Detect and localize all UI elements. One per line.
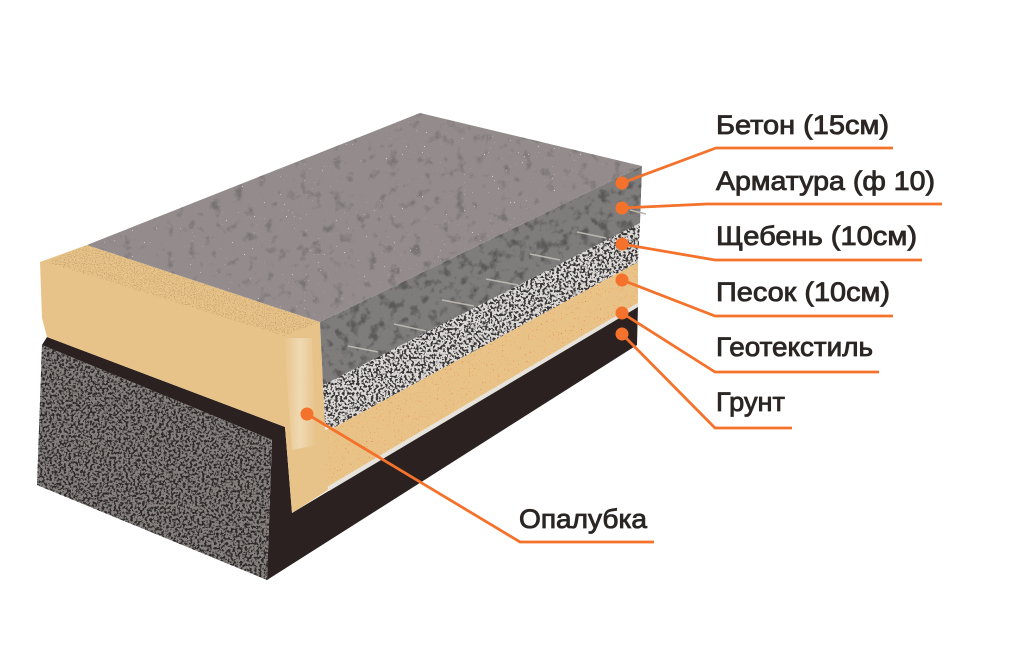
label: Щебень: Щебень (10см) bbox=[716, 221, 917, 251]
label: Щебень bbox=[616, 221, 922, 260]
geotextile layer bbox=[327, 303, 638, 491]
label: Песок: Песок (10см) bbox=[716, 277, 890, 307]
label: Бетон bbox=[616, 110, 893, 190]
formwork timber bbox=[40, 245, 328, 513]
label: Грунт: Грунт bbox=[716, 387, 785, 417]
label: Опалубка bbox=[300, 408, 654, 542]
label: Грунт bbox=[616, 328, 792, 428]
formwork stippled shading bbox=[46, 245, 320, 336]
label: Геотекстиль bbox=[616, 306, 879, 372]
formwork pale end strip bbox=[284, 338, 316, 450]
road cross-section illustration bbox=[37, 113, 646, 580]
sand layer bbox=[323, 262, 638, 487]
rebar ends bbox=[348, 210, 646, 352]
label: Геотекстиль: Геотекстиль bbox=[716, 332, 873, 362]
label: Бетон: Бетон (15см) bbox=[716, 110, 889, 140]
ground layer: front textured face bbox=[37, 345, 272, 580]
concrete front face bbox=[320, 166, 642, 385]
label: Арматура: Арматура (ф 10) bbox=[716, 166, 935, 196]
ground layer: black side bbox=[42, 305, 638, 580]
label: Арматура bbox=[616, 166, 942, 214]
label: Опалубка: Опалубка bbox=[519, 504, 648, 534]
concrete top face bbox=[87, 113, 642, 322]
gravel layer bbox=[323, 223, 640, 428]
label: Песок bbox=[616, 274, 893, 316]
